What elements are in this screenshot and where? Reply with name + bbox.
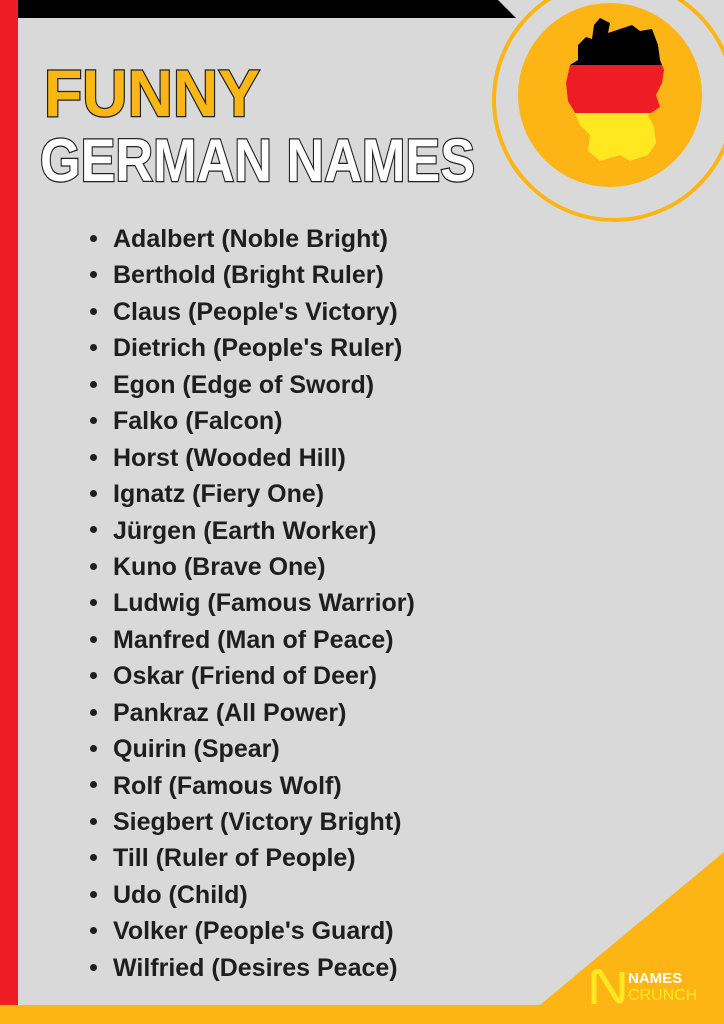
- list of names: Ignatz (Fiery One): [113, 480, 324, 508]
- title: FUNNY: FUNNY: [44, 56, 260, 130]
- list of names: Siegbert (Victory Bright): [113, 808, 401, 836]
- list of names: Kuno (Brave One): [113, 553, 326, 581]
- title: GERMAN NAMES: GERMAN NAMES: [40, 127, 475, 194]
- list of names: Falko (Falcon): [113, 407, 282, 435]
- list of names: Dietrich (People's Ruler): [113, 334, 402, 362]
- list of names: Horst (Wooded Hill): [113, 444, 346, 472]
- list of names: Ludwig (Famous Warrior): [113, 589, 415, 617]
- list of names: Till (Ruler of People): [113, 844, 356, 872]
- list of names: Rolf (Famous Wolf): [113, 772, 342, 800]
- list of names: Volker (People's Guard): [113, 917, 394, 945]
- list of names: Quirin (Spear): [113, 735, 280, 763]
- list of names: Adalbert (Noble Bright): [113, 225, 388, 253]
- list of names: Pankraz (All Power): [113, 699, 346, 727]
- list of names: [90, 225, 415, 982]
- list of names: Jürgen (Earth Worker): [113, 516, 376, 544]
- list of names: Oskar (Friend of Deer): [113, 662, 377, 690]
- icon: germany map flag: [566, 18, 664, 161]
- logo: names crunch: CRUNCH: [628, 987, 697, 1004]
- logo: names crunch: NAMES: [628, 970, 682, 987]
- logo: names crunch: [592, 969, 697, 1004]
- list of names: Egon (Edge of Sword): [113, 371, 374, 399]
- list of names: Wilfried (Desires Peace): [113, 954, 398, 982]
- list of names: Manfred (Man of Peace): [113, 626, 394, 654]
- list of names: Claus (People's Victory): [113, 298, 398, 326]
- list of names: Berthold (Bright Ruler): [113, 261, 384, 289]
- left red bar: [0, 0, 18, 1024]
- list of names: Udo (Child): [113, 881, 248, 909]
